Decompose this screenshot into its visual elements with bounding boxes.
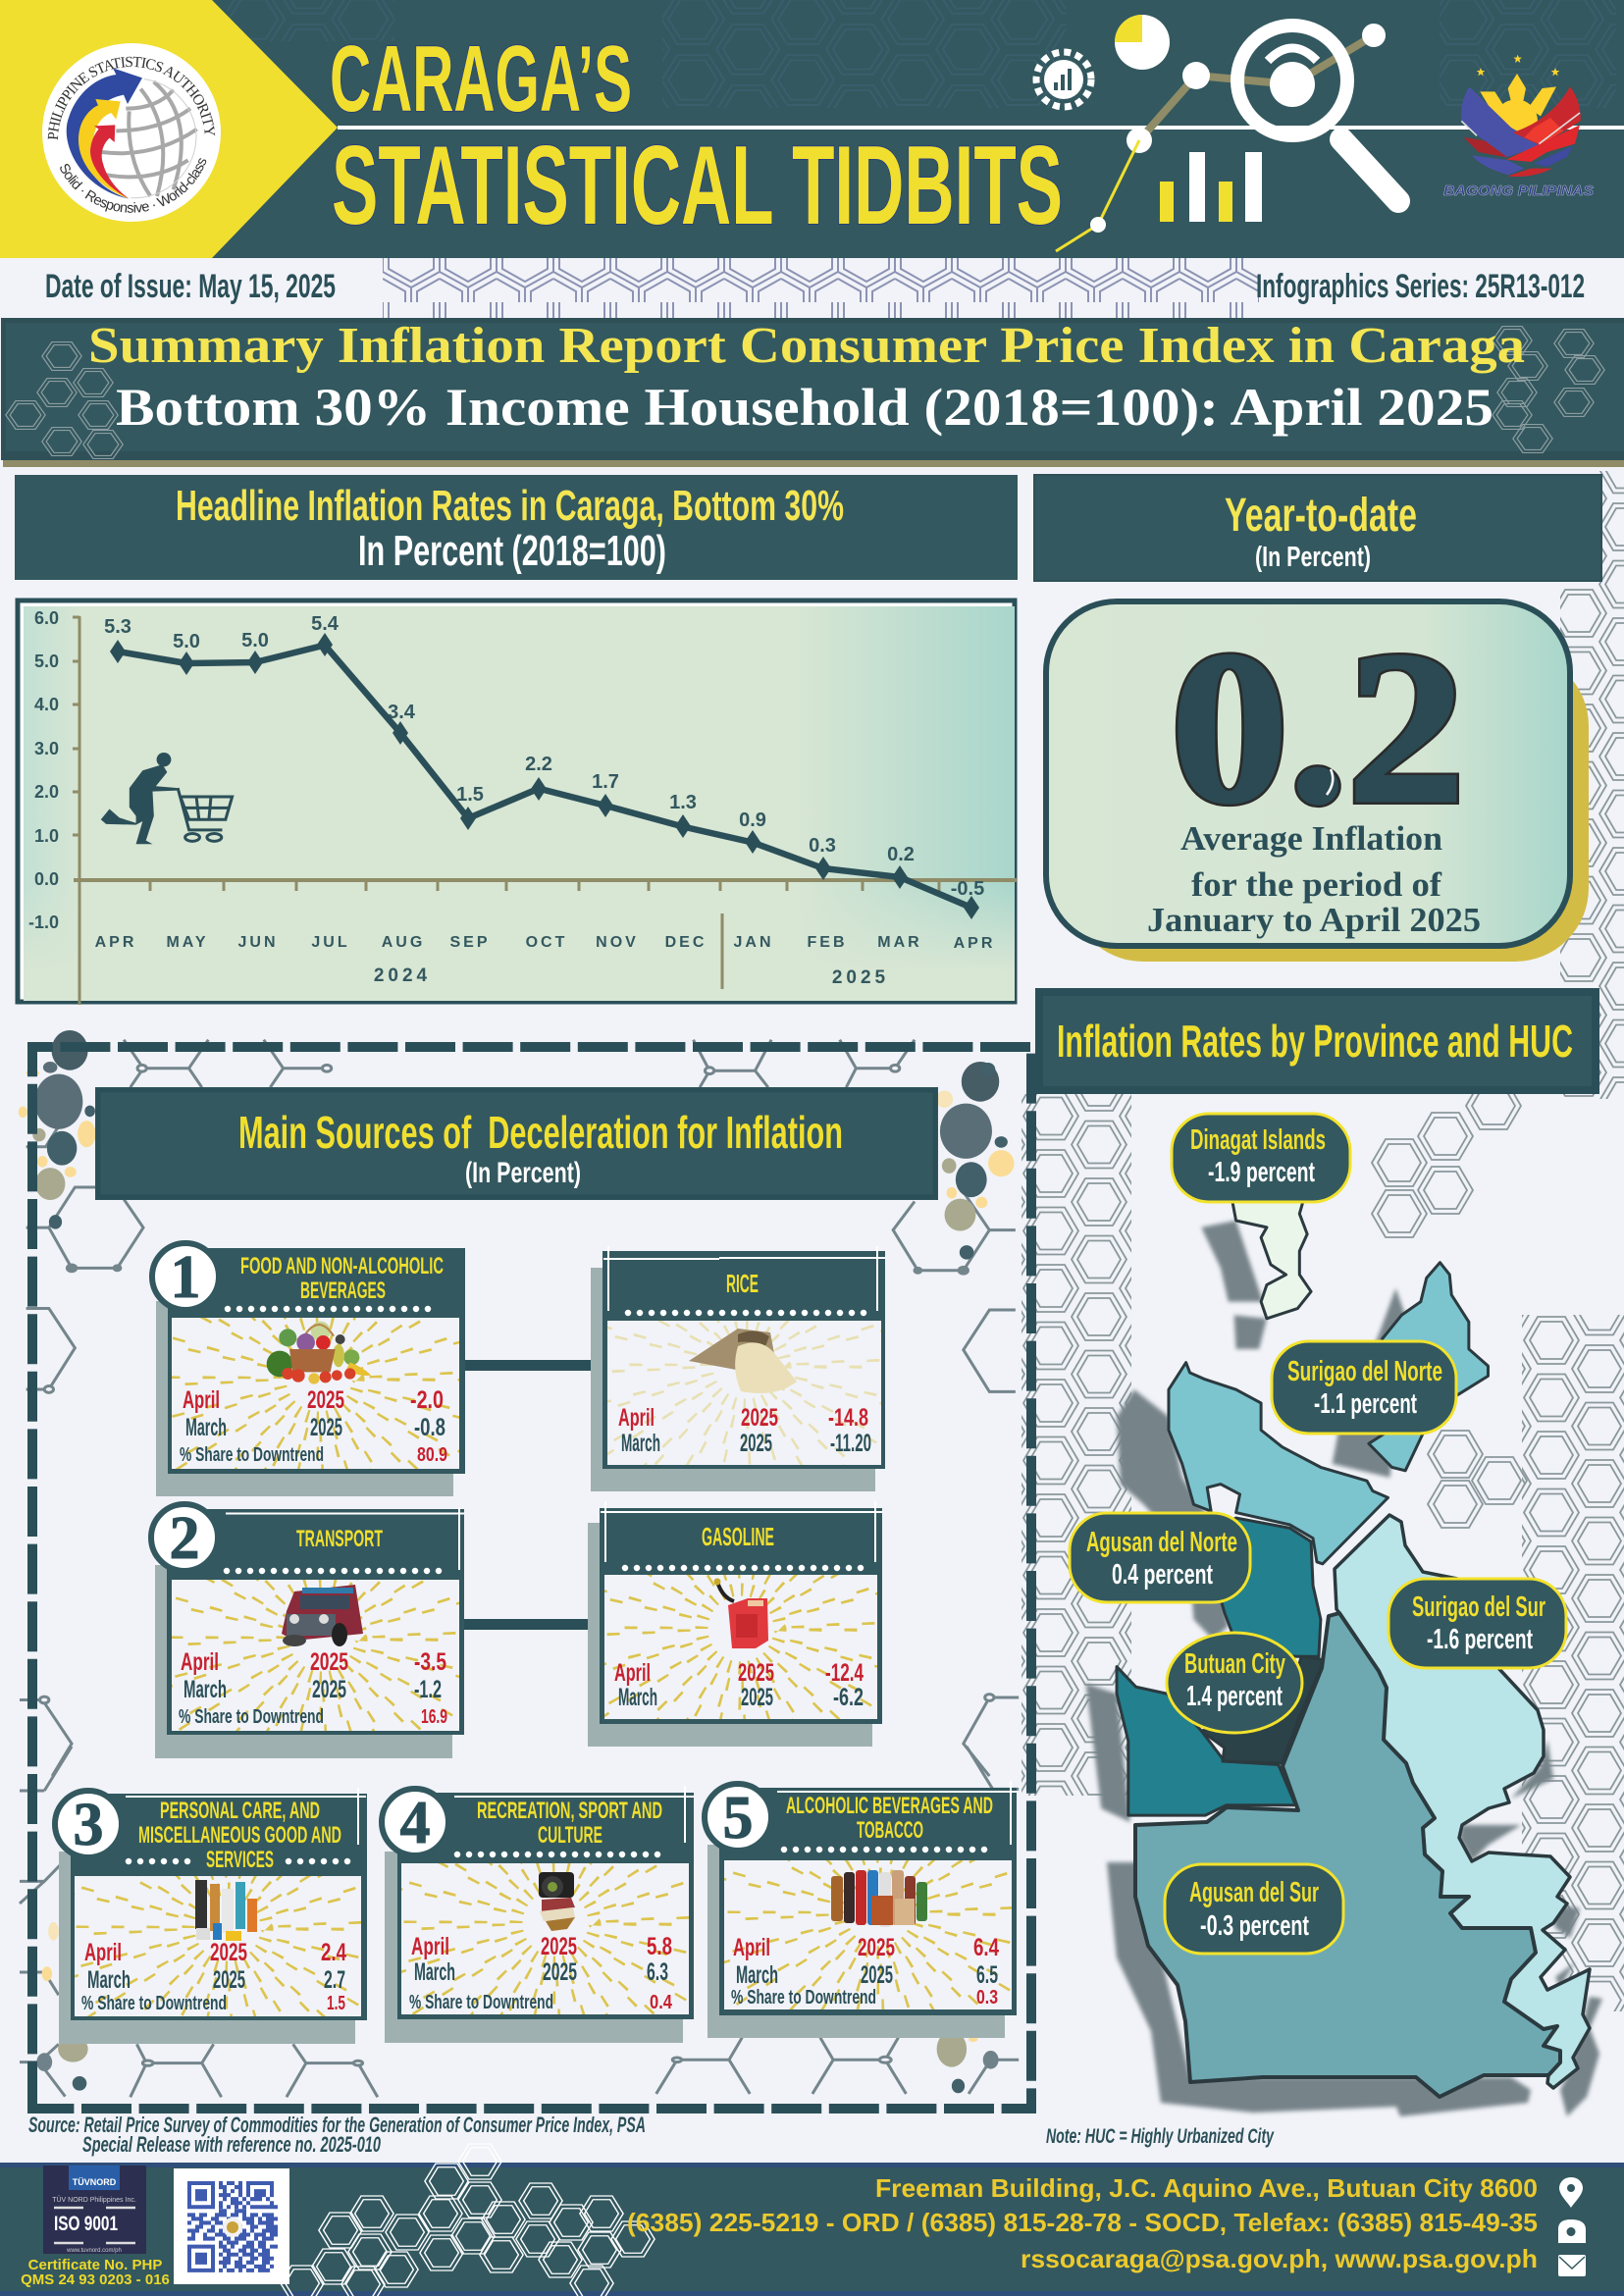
data labels: 5.0 xyxy=(241,630,269,652)
heading: year to date: (In Percent) xyxy=(1255,542,1371,573)
card 4: recreation: 2025 xyxy=(541,1933,577,1960)
data labels: 5.4 xyxy=(311,613,340,635)
card 5: alcoholic beverages: March xyxy=(736,1961,778,1989)
card 2: transport: 2025 xyxy=(312,1676,346,1703)
data line xyxy=(110,633,979,919)
caption xyxy=(1147,819,1481,939)
card 5: alcoholic beverages: 6.5 xyxy=(976,1961,998,1989)
contact details: rssocaraga@psa.gov.ph, www.psa.gov.ph xyxy=(1021,2244,1538,2273)
card 2: transport: -1.2 xyxy=(414,1676,442,1703)
heading: main sources: (In Percent) xyxy=(465,1157,581,1189)
label: Agusan del Sur xyxy=(1165,1864,1343,1954)
y axis labels: -1.0 xyxy=(28,913,59,932)
card 2: transport: TRANSPORT xyxy=(296,1526,383,1552)
data labels: 0.2 xyxy=(887,844,915,865)
card 1: food: April xyxy=(183,1386,220,1414)
Bagong Pilipinas logo xyxy=(1443,55,1594,199)
label: Surigao del Sur xyxy=(1388,1579,1566,1668)
card 3: personal care: 2025 xyxy=(210,1939,247,1966)
card 5: alcoholic beverages xyxy=(702,1781,1017,2038)
month labels: FEB xyxy=(807,934,848,951)
card 3: personal care: 3 xyxy=(73,1792,104,1858)
icon: shopper with cart xyxy=(101,753,233,844)
month labels: JAN xyxy=(733,934,774,951)
heading: main sources xyxy=(95,1087,938,1200)
title line 2: Bottom 30% Income Household (2018=100): April 2025 xyxy=(116,378,1493,437)
card 4: recreation: % Share to Downtrend xyxy=(409,1992,553,2013)
card 2: transport: April xyxy=(181,1648,219,1676)
data labels xyxy=(104,613,984,900)
month labels: OCT xyxy=(526,934,567,951)
certificate number xyxy=(21,2257,170,2288)
label: Agusan del Norte: Agusan del Norte xyxy=(1086,1527,1237,1558)
data labels: 3.4 xyxy=(388,702,416,723)
card 2: transport: -3.5 xyxy=(414,1648,446,1676)
label: Surigao del Norte: -1.1 percent xyxy=(1314,1388,1417,1420)
source note: Special Release with reference no. 2025-010 xyxy=(82,2132,381,2157)
icon: location pin xyxy=(1559,2177,1583,2208)
card 4: recreation: April xyxy=(411,1933,449,1960)
PSA logo: PHILIPPINE STATISTICS AUTHORITY xyxy=(47,57,216,140)
card 5: alcoholic beverages: April xyxy=(733,1934,770,1961)
source note: Source: Retail Price Survey of Commodities for the Generation of Consumer Price Index, PSA xyxy=(28,2113,646,2137)
card 4: recreation xyxy=(379,1786,694,2043)
icon: gas can xyxy=(714,1578,768,1648)
icon: personal care bottles xyxy=(195,1880,257,1941)
card 2b: gasoline: April xyxy=(614,1659,651,1687)
icon: analytics graphic xyxy=(1036,15,1398,251)
label: Surigao del Sur: Surigao del Sur xyxy=(1412,1592,1545,1623)
caption: Average Inflation xyxy=(1180,819,1442,858)
title: Caraga's: CARAGA’S xyxy=(330,26,632,131)
month labels: 2025 xyxy=(832,967,889,988)
icon: jeepney xyxy=(282,1585,363,1646)
month labels: APR xyxy=(95,934,136,951)
Surigao del Norte xyxy=(1169,1263,1488,1564)
label: Dinagat Islands: -1.9 percent xyxy=(1208,1157,1315,1188)
heading: headline inflation rates: Headline Inflation Rates in Caraga, Bottom 30% xyxy=(176,482,844,530)
card 4: recreation: RECREATION, SPORT AND xyxy=(477,1798,662,1824)
Surigao del Sur xyxy=(1335,1515,1590,2088)
icon: camera and books xyxy=(539,1872,575,1931)
month labels: JUN xyxy=(237,934,279,951)
card 1: food: 1 xyxy=(171,1244,200,1311)
card 3: personal care: MISCELLANEOUS GOOD AND xyxy=(138,1822,341,1849)
card 1: food: -2.0 xyxy=(410,1386,444,1414)
PSA logo xyxy=(42,43,221,222)
card 4: recreation: 4 xyxy=(400,1790,430,1856)
icon: fruit basket xyxy=(267,1322,371,1384)
map note: Note: HUC = Highly Urbanized City xyxy=(1046,2125,1275,2148)
card 2: transport: % Share to Downtrend xyxy=(179,1706,324,1728)
month labels: AUG xyxy=(382,934,425,951)
card 3: personal care: 1.5 xyxy=(327,1993,345,2014)
ISO certification badge: TÜV NORD Philippines Inc. xyxy=(52,2196,136,2204)
panel: main sources decorative network xyxy=(19,1030,1019,2097)
data labels: 5.0 xyxy=(173,631,200,652)
card 1b: rice: 2025 xyxy=(740,1430,772,1457)
icon: envelope xyxy=(1558,2255,1586,2276)
ISO certification badge: ISO 9001 xyxy=(54,2213,118,2235)
card 1: food: BEVERAGES xyxy=(300,1278,386,1304)
label: Dinagat Islands xyxy=(1172,1114,1350,1202)
y axis labels: 0.0 xyxy=(34,869,59,889)
y axis labels: 6.0 xyxy=(34,608,59,628)
card 1b: rice: -14.8 xyxy=(828,1404,868,1432)
y axis labels: 1.0 xyxy=(34,826,59,846)
label: Dinagat Islands: Dinagat Islands xyxy=(1190,1124,1326,1156)
card 2: transport: 16.9 xyxy=(421,1706,447,1728)
label: Agusan del Sur: Agusan del Sur xyxy=(1189,1877,1319,1908)
label: Butuan City xyxy=(1167,1633,1302,1733)
background honeycomb: right edge xyxy=(1560,471,1624,1099)
icon: liquor bottles xyxy=(831,1870,927,1927)
caption: for the period of xyxy=(1191,865,1441,904)
card 4: recreation: CULTURE xyxy=(538,1822,602,1849)
data labels: 1.5 xyxy=(456,784,484,806)
title: Statistical Tidbits: STATISTICAL TIDBITS xyxy=(332,124,1063,248)
card 4: recreation: 6.3 xyxy=(647,1958,668,1986)
card 4: recreation: 5.8 xyxy=(647,1933,672,1960)
connector 2 xyxy=(464,1619,588,1630)
map of Caraga xyxy=(1086,1200,1602,2116)
card 5: alcoholic beverages: TOBACCO xyxy=(857,1817,923,1844)
month labels: DEC xyxy=(665,934,707,951)
month labels: MAR xyxy=(877,934,922,951)
heading: main sources: Main Sources of Deceleration for Inflation xyxy=(238,1107,843,1158)
card 2b: gasoline: -12.4 xyxy=(825,1659,864,1687)
y axis labels: 5.0 xyxy=(34,652,59,671)
card 1b: rice: March xyxy=(621,1430,660,1457)
certificate number: Certificate No. PHP xyxy=(28,2257,162,2273)
card 5: alcoholic beverages: 6.4 xyxy=(973,1934,999,1961)
Agusan del Sur xyxy=(1135,1613,1560,2097)
label: Agusan del Norte: 0.4 percent xyxy=(1112,1559,1213,1591)
card 1: food: March xyxy=(185,1414,227,1441)
card 1: food: 80.9 xyxy=(417,1444,447,1466)
contact details: (6385) 225-5219 - ORD / (6385) 815-28-78 - SOCD, Telefax: (6385) 815-49-35 xyxy=(627,2208,1538,2237)
heading: year to date xyxy=(1034,475,1601,581)
contact details xyxy=(627,2173,1538,2273)
card 1b: rice: -11.20 xyxy=(830,1430,871,1457)
big number: 0.2 xyxy=(1171,607,1465,849)
month labels: SEP xyxy=(449,934,491,951)
footer xyxy=(0,2144,1624,2296)
label: Surigao del Norte: Surigao del Norte xyxy=(1287,1356,1442,1387)
card 1b: rice: RICE xyxy=(726,1269,759,1298)
card 2b: gasoline: 2025 xyxy=(738,1659,774,1687)
Agusan del Norte xyxy=(1117,1518,1321,1815)
data labels: -0.5 xyxy=(951,878,984,900)
header banner xyxy=(0,0,1624,258)
heading: year to date: Year-to-date xyxy=(1225,490,1417,542)
card 5: alcoholic beverages: % Share to Downtrend xyxy=(731,1987,876,2009)
icon: rice sack xyxy=(689,1329,797,1393)
card 5: alcoholic beverages: 0.3 xyxy=(976,1987,998,2009)
card 3: personal care: March xyxy=(87,1966,131,1994)
panel: dashed frame xyxy=(32,1047,1031,2109)
big number: 0.2 xyxy=(1171,607,1465,849)
contact details: Freeman Building, J.C. Aquino Ave., Butuan City 8600 xyxy=(875,2173,1538,2203)
card 1b: rice: April xyxy=(618,1404,655,1432)
card 2b: gasoline: 2025 xyxy=(741,1684,773,1711)
card 5: alcoholic beverages: ALCOHOLIC BEVERAGES AND xyxy=(786,1793,993,1819)
card 1: food: 2025 xyxy=(310,1414,342,1441)
footer honeycomb xyxy=(281,2144,655,2296)
month labels xyxy=(95,934,995,988)
card 4: recreation: 2025 xyxy=(543,1958,577,1986)
y axis labels: 4.0 xyxy=(34,695,59,714)
label: Agusan del Sur: -0.3 percent xyxy=(1200,1910,1309,1942)
heading: inflation by province xyxy=(1035,988,1599,1094)
card 2: transport: 2 xyxy=(169,1505,200,1572)
card 5: alcoholic beverages: 5 xyxy=(722,1785,754,1852)
card 3: personal care xyxy=(52,1788,367,2044)
card 5: alcoholic beverages: 2025 xyxy=(858,1934,895,1961)
card 3: personal care: PERSONAL CARE, AND xyxy=(160,1798,320,1824)
card 2b: gasoline xyxy=(588,1501,882,1747)
card 1: food: FOOD AND NON-ALCOHOLIC xyxy=(240,1253,444,1279)
card 2: transport xyxy=(148,1501,464,1758)
certificate number: QMS 24 93 0203 - 016 xyxy=(21,2271,170,2288)
y axis labels xyxy=(28,608,59,932)
card 3: personal care: % Share to Downtrend xyxy=(81,1993,227,2014)
date of issue: Date of Issue: May 15, 2025 xyxy=(45,268,336,305)
card 1: food xyxy=(149,1240,465,1496)
connector 1 xyxy=(465,1360,591,1371)
data labels: 5.3 xyxy=(104,616,131,638)
label: Butuan City: Butuan City xyxy=(1184,1648,1285,1680)
data labels: 1.7 xyxy=(592,771,619,793)
card 1: food: 2025 xyxy=(307,1386,344,1414)
card 3: personal care: 2.4 xyxy=(321,1939,346,1966)
heading: headline inflation rates xyxy=(15,475,1018,580)
card 1b: rice: 2025 xyxy=(741,1404,778,1432)
main title strip xyxy=(1,318,1624,467)
month labels: 2024 xyxy=(374,965,431,986)
card 2: transport: March xyxy=(183,1676,227,1703)
card 3: personal care: SERVICES xyxy=(206,1847,274,1873)
background honeycomb: map region xyxy=(1022,1082,1624,2011)
month labels: MAY xyxy=(166,934,209,951)
card 4: recreation: 0.4 xyxy=(650,1992,673,2013)
card 3: personal care: 2.7 xyxy=(324,1966,345,1994)
card 2: transport: 2025 xyxy=(310,1648,348,1676)
card 2b: gasoline: -6.2 xyxy=(833,1684,864,1711)
data labels: 2.2 xyxy=(525,754,552,775)
title line 1: Summary Inflation Report Consumer Price Index in Caraga xyxy=(88,318,1525,374)
Dinagat Islands xyxy=(1232,1200,1311,1319)
icon: telephone xyxy=(1558,2219,1586,2243)
month labels: JUL xyxy=(311,934,350,951)
label: Agusan del Norte xyxy=(1070,1513,1250,1602)
card 2b: gasoline: GASOLINE xyxy=(702,1522,774,1551)
ISO certification badge: www.tuvnord.com/ph xyxy=(66,2248,122,2254)
map shadow xyxy=(1086,1221,1602,2116)
card 2b: gasoline: March xyxy=(618,1684,657,1711)
ISO certification badge xyxy=(43,2166,146,2254)
label: Surigao del Norte xyxy=(1272,1341,1456,1434)
card 1: food: -0.8 xyxy=(414,1414,445,1441)
PSA logo: Solid · Responsive · World-class xyxy=(60,158,206,213)
data labels: 1.3 xyxy=(669,792,697,813)
panel: year to date average xyxy=(1046,601,1589,962)
month labels: APR xyxy=(954,935,995,952)
card 4: recreation: March xyxy=(414,1958,455,1986)
data labels: 0.3 xyxy=(809,835,836,857)
Bagong Pilipinas logo: BAGONG PILIPINAS xyxy=(1443,183,1594,199)
Butuan City xyxy=(1201,1656,1325,1763)
card 1b: rice xyxy=(591,1246,885,1491)
ISO certification badge: TÜVNORD xyxy=(73,2177,117,2187)
label: Surigao del Sur: -1.6 percent xyxy=(1427,1624,1533,1655)
line chart: headline inflation xyxy=(18,600,1017,1005)
card 1: food: % Share to Downtrend xyxy=(180,1444,324,1466)
caption: January to April 2025 xyxy=(1147,901,1481,939)
card 5: alcoholic beverages: 2025 xyxy=(861,1961,893,1989)
y axis labels: 2.0 xyxy=(34,782,59,802)
month labels: NOV xyxy=(596,934,639,951)
date strip honeycomb xyxy=(383,258,1259,318)
source note xyxy=(28,2113,646,2157)
heading: headline inflation rates: In Percent (2018=100) xyxy=(358,527,666,575)
card 3: personal care: 2025 xyxy=(213,1966,245,1994)
card 3: personal care: April xyxy=(84,1939,122,1966)
y axis labels: 3.0 xyxy=(34,739,59,758)
QR code xyxy=(174,2168,289,2284)
data labels: 0.9 xyxy=(739,809,766,831)
label: Butuan City: 1.4 percent xyxy=(1186,1681,1283,1712)
